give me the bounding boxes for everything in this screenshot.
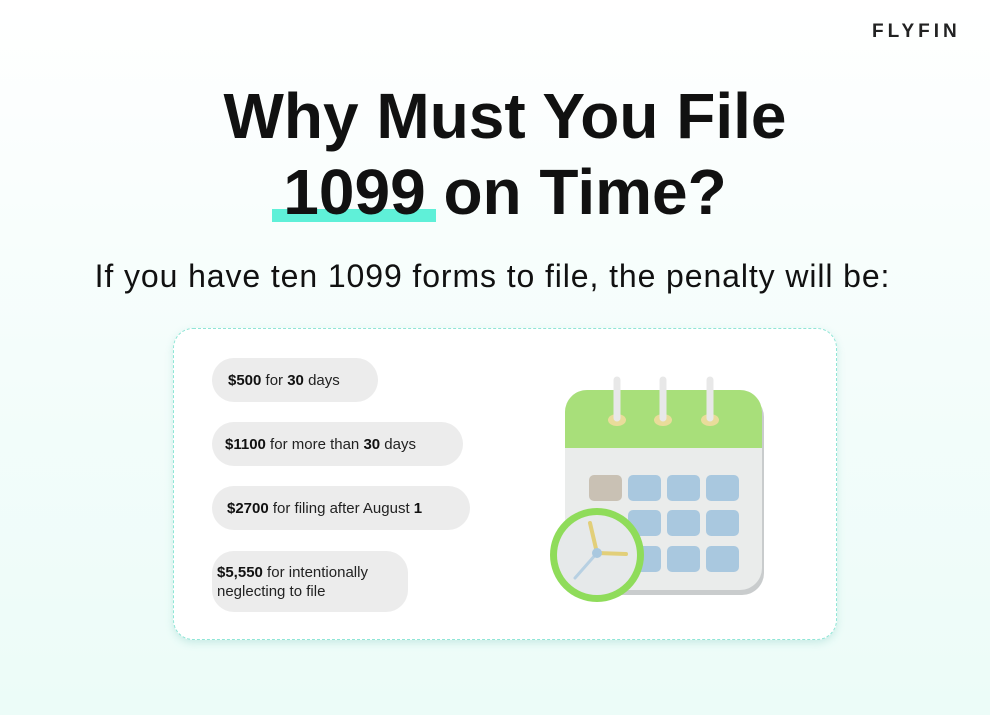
title: 1099 on Time? — [283, 156, 727, 228]
pill: $500: $500 for 30 days — [228, 372, 340, 388]
pill: $2700: $2700 for filing after August 1 — [227, 500, 422, 516]
pill: $500 — [212, 358, 378, 402]
icon: calendar with clock — [550, 376, 764, 602]
pill: $5,550: neglecting to file — [217, 582, 325, 600]
pill: $1100: $1100 for more than 30 days — [225, 436, 416, 452]
title — [224, 80, 786, 228]
pill: $5,550: $5,550 for intentionally — [217, 564, 368, 580]
pill: $2700 — [212, 486, 470, 530]
logo: FLYFIN — [872, 21, 961, 42]
title: Why Must You File — [224, 80, 786, 152]
pill: $1100 — [212, 422, 463, 466]
subtitle: If you have ten 1099 forms to file, the penalty will be: — [95, 258, 890, 294]
pill: $5,550 — [212, 551, 408, 612]
panel: penalties card — [173, 328, 837, 640]
